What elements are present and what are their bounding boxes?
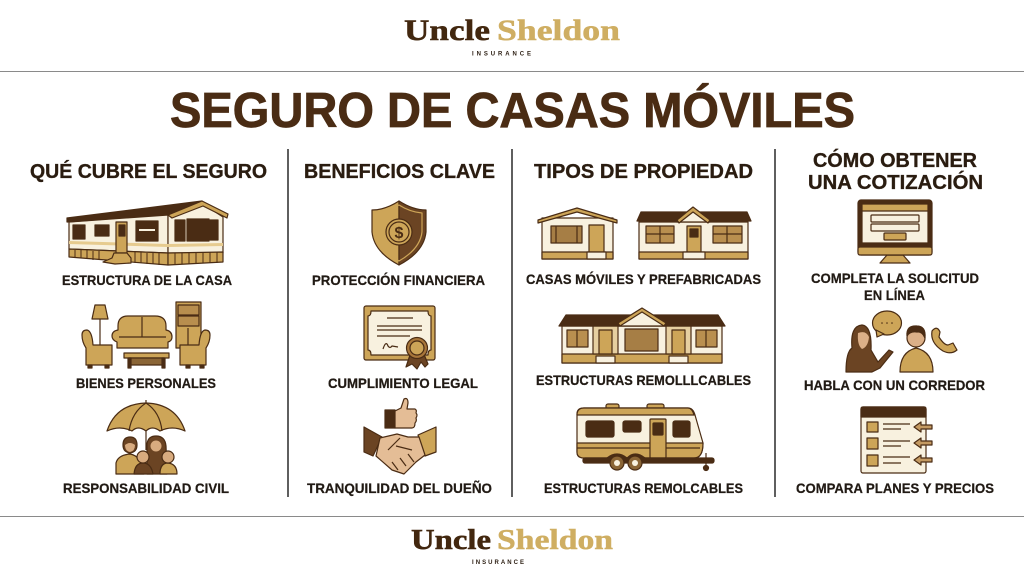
icon: umbrella and family <box>107 400 185 474</box>
icon: large house <box>559 308 725 363</box>
label: en línea: EN LÍNEA <box>864 287 925 303</box>
logo: bottom <box>411 525 614 566</box>
heading: cómo obtener: CÓMO OBTENER <box>813 148 978 172</box>
label: protección: PROTECCIÓN FINANCIERA <box>312 271 485 288</box>
label: casas móviles: CASAS MÓVILES Y PREFABRICADAS <box>526 270 761 287</box>
label: responsabilidad: RESPONSABILIDAD CIVIL <box>63 480 229 496</box>
icon: computer form <box>858 200 932 263</box>
logo: top: Uncle <box>404 14 490 47</box>
heading: tipos: TIPOS DE PROPIEDAD <box>534 161 753 183</box>
title: SEGURO DE CASAS MÓVILES <box>170 83 855 138</box>
logo: top: Sheldon <box>497 14 620 47</box>
icon: travel trailer <box>577 404 714 470</box>
label: bienes: BIENES PERSONALES <box>76 375 216 391</box>
heading: qué cubre: QUÉ CUBRE EL SEGURO <box>30 160 267 183</box>
icon: ranch house <box>637 207 751 259</box>
icon: small house <box>538 208 617 259</box>
label: tranquilidad: TRANQUILIDAD DEL DUEÑO <box>307 479 492 496</box>
icon: mobile home <box>67 201 228 265</box>
logo: top: INSURANCE <box>472 52 531 58</box>
icon: shield: $ <box>395 225 404 242</box>
label: completa: COMPLETA LA SOLICITUD <box>811 270 979 286</box>
label: estructuras remolllcables: ESTRUCTURAS REMOLLLCABLES <box>536 372 751 388</box>
label: estructura: ESTRUCTURA DE LA CASA <box>62 272 232 288</box>
icon: talking with a broker <box>846 311 957 372</box>
logo: bottom: Uncle <box>411 525 491 556</box>
panel: qué cubre el seguro <box>30 160 267 496</box>
label: estructuras remolcables: ESTRUCTURAS REMOLCABLES <box>544 480 743 496</box>
heading: beneficios: BENEFICIOS CLAVE <box>304 161 495 183</box>
icon: certificate <box>364 306 435 369</box>
panel: beneficios clave <box>304 161 495 496</box>
label: compara: COMPARA PLANES Y PRECIOS <box>796 480 994 496</box>
icon: furniture <box>82 302 210 368</box>
icon: handshake and thumbs up <box>364 398 436 474</box>
logo: top <box>404 14 620 58</box>
icon: checklist <box>861 407 932 473</box>
label: habla: HABLA CON UN CORREDOR <box>804 377 985 393</box>
heading: una cotización: UNA COTIZACIÓN <box>808 170 983 194</box>
label: cumplimiento: CUMPLIMIENTO LEGAL <box>328 375 478 391</box>
panel: tipos de propiedad <box>526 161 761 496</box>
icon: shield <box>372 201 426 265</box>
logo: bottom: Sheldon <box>497 525 614 556</box>
panel: cómo obtener una cotización <box>796 148 994 496</box>
logo: bottom: INSURANCE <box>472 560 524 566</box>
